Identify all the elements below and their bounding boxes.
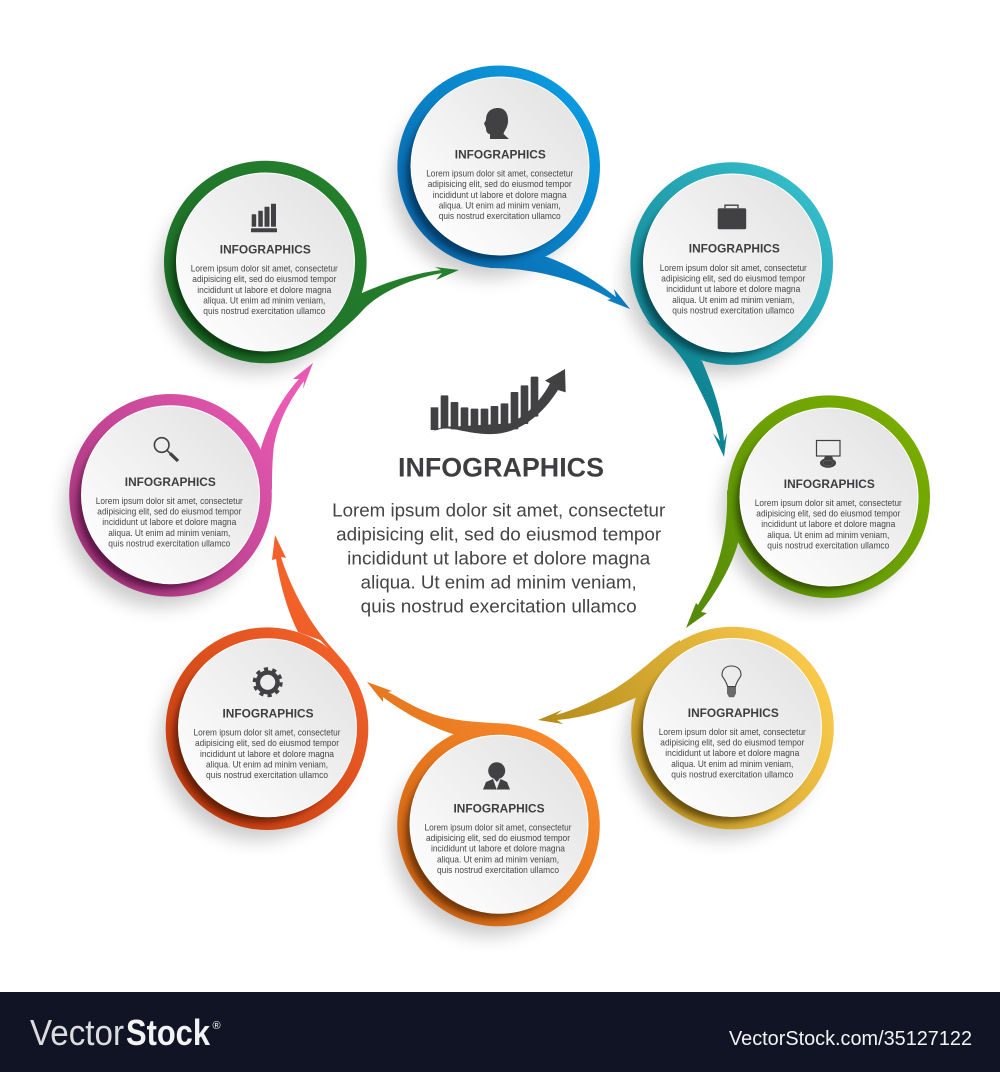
icon: head [484, 108, 509, 139]
text block: main description: adipisicing elit, sed do eiusmod tempor [336, 525, 661, 545]
icon: businessman [483, 762, 510, 790]
ring and arrow: blue [397, 66, 630, 309]
heading: INFOGRAPHICS [689, 242, 780, 256]
text block: incididunt ut labore et dolore magna [666, 284, 801, 294]
text block: adipisicing elit, sed do eiusmod tempor [661, 274, 805, 284]
text block: quis nostrud exercitation ullamco [437, 865, 559, 875]
ring and arrow: teal [630, 162, 833, 457]
icon: briefcase [718, 205, 746, 229]
ring and arrow: red [166, 535, 368, 830]
logo: VectorStock: Stock [126, 1012, 211, 1053]
text block: quis nostrud exercitation ullamco [108, 538, 230, 548]
text block: main description [332, 501, 665, 616]
text block: adipisicing elit, sed do eiusmod tempor [428, 179, 572, 189]
text block: aliqua. Ut enim ad minim veniam, [767, 530, 889, 540]
ring and arrow: yellow [538, 627, 834, 829]
text block: main description: incididunt ut labore et dolore magna [347, 549, 651, 569]
ring and arrow: dark green [164, 161, 459, 363]
text block [755, 498, 902, 550]
icon: bar chart [251, 204, 277, 232]
panel: step 1 blue [392, 66, 630, 309]
text block: adipisicing elit, sed do eiusmod tempor [97, 507, 241, 517]
text block: main description: quis nostrud exercitation ullamco [361, 596, 637, 616]
text block [660, 263, 807, 315]
text block: incididunt ut labore et dolore magna [431, 844, 566, 854]
text block: quis nostrud exercitation ullamco [767, 540, 889, 550]
footer bar [0, 992, 1000, 1072]
text block: aliqua. Ut enim ad minim veniam, [439, 200, 561, 210]
icon: magnifier [154, 438, 178, 461]
text block: quis nostrud exercitation ullamco [671, 769, 793, 779]
text block: Lorem ipsum dolor sit amet, consectetur [194, 728, 340, 738]
text block: Lorem ipsum dolor sit amet, consectetur [424, 822, 572, 832]
text block: quis nostrud exercitation ullamco [672, 305, 794, 315]
text block: adipisicing elit, sed do eiusmod tempor [660, 738, 804, 748]
heading: INFOGRAPHICS [454, 802, 544, 816]
text block: aliqua. Ut enim ad minim veniam, [437, 854, 559, 864]
heading: INFOGRAPHICS [222, 707, 314, 721]
text block: aliqua. Ut enim ad minim veniam, [206, 759, 328, 769]
text block [659, 727, 806, 779]
text block: Lorem ipsum dolor sit amet, consectetur [96, 496, 243, 506]
text block: main description: Lorem ipsum dolor sit amet, consectetur [332, 501, 665, 521]
heading: INFOGRAPHICS [784, 477, 875, 491]
icon: monitor [816, 440, 840, 468]
text block [194, 728, 340, 780]
panel: step 7 magenta [64, 363, 313, 607]
panel: step 6 red [160, 535, 368, 840]
text block [426, 169, 573, 221]
text block: quis nostrud exercitation ullamco [203, 306, 325, 316]
text block: incididunt ut labore et dolore magna [200, 749, 335, 759]
text block: adipisicing elit, sed do eiusmod tempor [192, 274, 336, 284]
text block [96, 496, 243, 548]
text block: adipisicing elit, sed do eiusmod tempor [195, 738, 339, 748]
text block [424, 822, 572, 875]
text block: Lorem ipsum dolor sit amet, consectetur [191, 264, 338, 274]
text block: incididunt ut labore et dolore magna [102, 517, 237, 527]
text block [191, 264, 338, 316]
heading: INFOGRAPHICS [455, 148, 546, 162]
heading: INFOGRAPHICS [220, 242, 311, 256]
text block: adipisicing elit, sed do eiusmod tempor [756, 509, 900, 519]
text block: aliqua. Ut enim ad minim veniam, [672, 295, 794, 305]
panel: step 8 dark green [159, 161, 459, 373]
icon: rising bar chart with arrow [427, 369, 566, 437]
panel: step 5 orange [367, 682, 600, 936]
text block: Lorem ipsum dolor sit amet, consectetur [660, 263, 807, 273]
text block: incididunt ut labore et dolore magna [761, 519, 896, 529]
ring and arrow: orange [367, 682, 600, 926]
text block: quis nostrud exercitation ullamco [206, 770, 328, 780]
panel: center [332, 369, 665, 616]
heading: INFOGRAPHICS [125, 475, 216, 489]
icon: light bulb [722, 666, 741, 697]
footer reference text: VectorStock.com/35127122 [729, 1028, 972, 1050]
panel: step 3 lime green [686, 395, 930, 628]
text block: main description: aliqua. Ut enim ad minim veniam, [361, 573, 637, 593]
ring and arrow: magenta [69, 363, 313, 597]
text block: Lorem ipsum dolor sit amet, consectetur [659, 727, 806, 737]
logo: VectorStock [30, 1012, 221, 1053]
icon: gear [255, 669, 281, 695]
ring and arrow: lime green [686, 395, 930, 628]
heading: main title: INFOGRAPHICS [398, 452, 604, 482]
text block: incididunt ut labore et dolore magna [665, 748, 800, 758]
text block: Lorem ipsum dolor sit amet, consectetur [755, 498, 902, 508]
text block: incididunt ut labore et dolore magna [433, 190, 568, 200]
logo: VectorStock: ® [212, 1020, 221, 1032]
text block: Lorem ipsum dolor sit amet, consectetur [426, 169, 573, 179]
logo: VectorStock: Vector [30, 1012, 124, 1053]
heading: INFOGRAPHICS [688, 706, 779, 720]
panel: step 2 teal [625, 162, 833, 457]
text block: incididunt ut labore et dolore magna [197, 285, 332, 295]
text block: aliqua. Ut enim ad minim veniam, [108, 528, 230, 538]
panel: step 4 yellow [538, 627, 834, 839]
text block: aliqua. Ut enim ad minim veniam, [203, 295, 325, 305]
text block: adipisicing elit, sed do eiusmod tempor [426, 833, 570, 843]
text block: quis nostrud exercitation ullamco [439, 211, 561, 221]
text block: aliqua. Ut enim ad minim veniam, [671, 759, 793, 769]
